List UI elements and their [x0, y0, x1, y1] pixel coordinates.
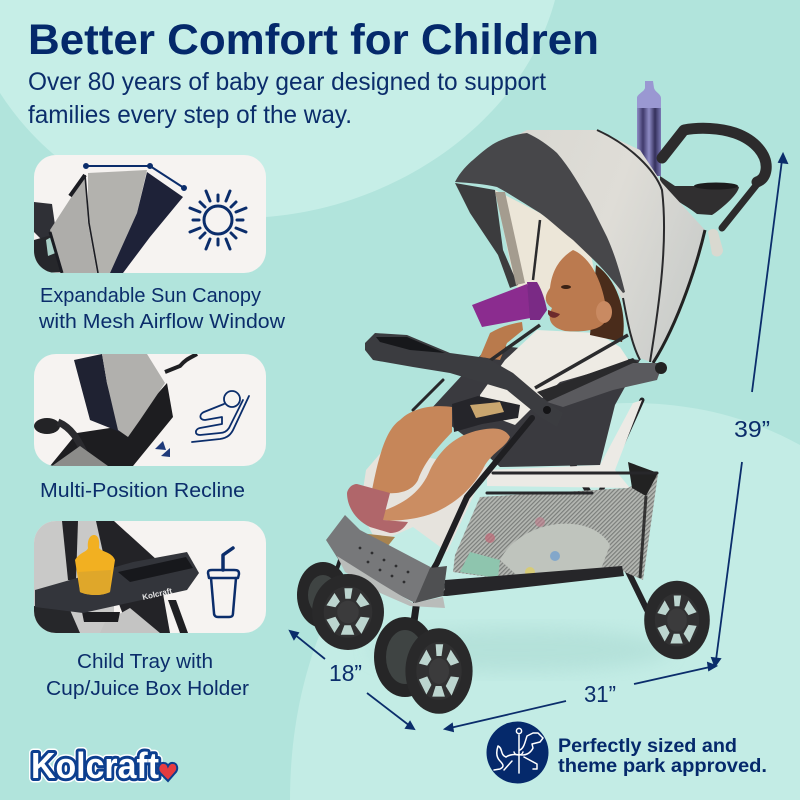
label: sun canopy [38, 285, 286, 333]
baby head [546, 250, 607, 331]
push handle [662, 128, 766, 228]
baby shirt [480, 330, 630, 425]
baby hair [590, 265, 624, 342]
baby arm [480, 322, 523, 360]
tray bar [365, 333, 563, 427]
buckle [452, 396, 520, 432]
tray photo: Kolcraft [141, 586, 173, 602]
tray photo [34, 521, 199, 633]
subtitle: Over 80 years of baby gear designed to support [28, 68, 546, 96]
wheel: front left back [297, 562, 349, 628]
footrest [326, 515, 447, 608]
dimension: depth 18 inches: 18” [329, 660, 362, 686]
seat side arm [537, 358, 663, 407]
canopy measure line [84, 164, 186, 190]
icon: sun [190, 191, 246, 249]
icon: reclined seat [192, 391, 249, 442]
icon: carousel horse badge [486, 722, 548, 784]
canopy visor [455, 133, 625, 293]
wheel: rear [644, 581, 710, 659]
canopy photo [34, 170, 183, 273]
dimension: width 31 inches [445, 663, 716, 731]
callout: theme park approved: Perfectly sized and [558, 736, 737, 757]
logo: Kolcraft: Kolcraft [31, 745, 159, 786]
parent cup tray [660, 176, 739, 215]
shoes [347, 484, 408, 553]
canopy dark seam [533, 220, 540, 280]
logo: Kolcraft: Kolcraft [31, 745, 159, 786]
baby ear [596, 301, 612, 323]
seat back [430, 345, 640, 467]
recline photo [34, 354, 197, 466]
sippy cup [472, 282, 547, 327]
ground shadow [370, 628, 670, 672]
front legs [330, 418, 532, 650]
canopy inner rim [455, 183, 518, 288]
dimension: height 39 inches: 39” [734, 416, 770, 442]
rear frame [553, 400, 647, 610]
frame rails [413, 380, 657, 493]
dimension: depth 18 inches [290, 631, 414, 729]
label: child tray [46, 651, 249, 700]
label: child tray: Cup/Juice Box Holder [46, 678, 249, 700]
callout: theme park approved: theme park approved. [558, 756, 767, 777]
label: recline: Multi-Position Recline [40, 480, 245, 502]
label: child tray: Child Tray with [77, 651, 213, 673]
basket floor [443, 566, 624, 596]
canopy pivot [655, 362, 667, 374]
wheel: front left [312, 574, 384, 650]
yellow cup [75, 535, 115, 595]
panel: child tray [34, 521, 266, 633]
canopy interior [495, 190, 600, 300]
logo: Kolcraft: Kolcraft [31, 745, 159, 786]
callout: theme park approved [558, 736, 767, 777]
baby near leg [380, 428, 510, 521]
label: sun canopy: Expandable Sun Canopy [40, 285, 261, 307]
baby far thigh [372, 406, 452, 493]
stroller photo [297, 81, 766, 714]
panel: sun canopy [34, 155, 266, 273]
title: Better Comfort for Children [28, 16, 599, 64]
dimension: height 39 inches [712, 154, 787, 666]
seat cushion [360, 448, 487, 552]
panel: recline [34, 354, 266, 466]
subtitle [28, 68, 546, 129]
recline arrows [155, 441, 170, 457]
harness straps [488, 325, 628, 388]
basket mesh [453, 462, 658, 580]
dimension: width 31 inches: 31” [584, 681, 616, 707]
canopy stripe [495, 192, 525, 285]
label: sun canopy: with Mesh Airflow Window [38, 311, 286, 333]
water bottle [637, 81, 661, 176]
white seat fabric [487, 400, 642, 488]
subtitle: families every step of the way. [28, 101, 352, 129]
wheel: front right back [374, 617, 436, 697]
canopy shell [493, 130, 723, 363]
wheel: front right [405, 628, 473, 714]
icon: cup with straw [208, 548, 239, 617]
baby eye and mouth [548, 285, 571, 318]
